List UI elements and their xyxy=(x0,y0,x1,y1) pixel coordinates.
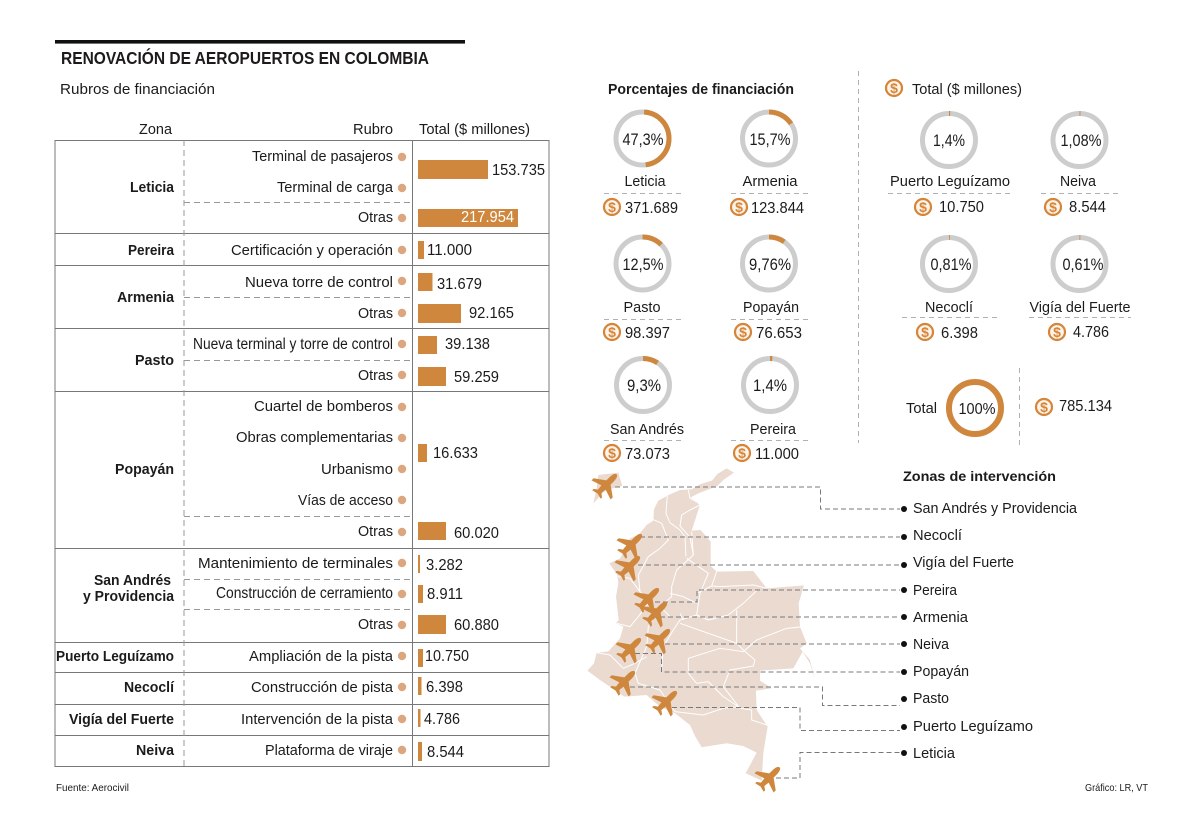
rubro labels: Otras xyxy=(358,368,393,384)
zone labels: Popayán xyxy=(115,462,174,478)
map legend: San Andrés y Providencia xyxy=(913,501,1078,517)
donut: Armenia xyxy=(731,112,808,217)
donut: Vigía del Fuerte: 4.786 xyxy=(1073,324,1109,341)
bar values: 31.679 xyxy=(437,276,482,293)
title: RENOVACIÓN DE AEROPUERTOS EN COLOMBIA xyxy=(61,47,429,68)
zone labels: Vigía del Fuerte xyxy=(69,712,174,728)
donut: San Andrés xyxy=(604,358,684,463)
bar values: 11.000 xyxy=(427,242,472,259)
rubro labels xyxy=(193,149,394,759)
rubro labels: Otras xyxy=(358,306,393,322)
bar values: 8.911 xyxy=(427,586,463,603)
table: rubros xyxy=(55,71,1149,797)
bar values: 6.398 xyxy=(426,679,463,696)
table column headers xyxy=(139,122,530,138)
rubro labels: Nueva torre de control xyxy=(245,275,393,291)
bar values: 10.750 xyxy=(425,648,469,665)
bar values: 217.954 xyxy=(461,209,514,226)
credit note: Gráfico: LR, VT xyxy=(1085,782,1149,794)
donut: Armenia: 123.844 xyxy=(751,200,804,217)
donut: Total xyxy=(906,368,1112,446)
map legend: Popayán xyxy=(913,664,969,680)
map legend: Necoclí xyxy=(913,528,962,544)
zone labels: Neiva xyxy=(136,743,175,759)
donut: Pereira: 1,4% xyxy=(753,377,787,395)
donut: Pereira: 11.000 xyxy=(755,446,799,463)
donut: Necoclí xyxy=(902,238,1000,342)
donut: Puerto Leguízamo: 1,4% xyxy=(933,132,965,150)
bar values: 39.138 xyxy=(445,336,490,353)
zone labels: Puerto Leguízamo xyxy=(56,649,174,665)
donut: Pereira xyxy=(731,358,808,463)
donut: Pasto xyxy=(604,237,684,342)
zone labels: Pereira xyxy=(128,243,175,259)
donut: Leticia: 371.689 xyxy=(625,200,678,217)
donut: Total: Total xyxy=(906,401,937,417)
zone labels: Armenia xyxy=(117,290,175,306)
bar values: 60.880 xyxy=(454,617,499,634)
rubro labels: Urbanismo xyxy=(321,462,393,478)
rubro labels: Mantenimiento de terminales xyxy=(198,556,393,572)
donut: Puerto Leguízamo xyxy=(888,114,1011,216)
donut: San Andrés: San Andrés xyxy=(610,422,684,438)
table column headers: Zona xyxy=(139,122,173,138)
bar values: 92.165 xyxy=(469,305,514,322)
map: department borders xyxy=(597,490,803,725)
donut: Neiva: 1,08% xyxy=(1060,132,1102,150)
map legend xyxy=(901,501,1078,762)
donut: Puerto Leguízamo: Puerto Leguízamo xyxy=(890,174,1010,190)
bar values xyxy=(424,162,545,761)
rubro labels: Plataforma de viraje xyxy=(265,743,393,759)
donut: Popayán: Popayán xyxy=(743,300,799,316)
rubro labels: Terminal de pasajeros xyxy=(252,149,393,165)
zone labels: Leticia xyxy=(130,180,175,196)
heading: total millones: Total ($ millones) xyxy=(912,82,1022,98)
donut: Pasto: 98.397 xyxy=(625,325,670,342)
donut: Leticia xyxy=(604,112,684,217)
donut: Popayán: 9,76% xyxy=(749,256,791,274)
bar chart: total by rubro xyxy=(418,160,545,761)
donut: Popayán: 76.653 xyxy=(756,325,802,342)
source note: Fuente: Aerocivil xyxy=(56,782,129,794)
donut: Pasto: 12,5% xyxy=(622,256,664,274)
leader lines xyxy=(615,487,900,778)
donut: Neiva: 8.544 xyxy=(1069,199,1106,216)
divider column xyxy=(858,71,860,443)
donut: San Andrés: 73.073 xyxy=(625,446,670,463)
map of Colombia xyxy=(587,468,815,781)
rubro labels: Intervención de la pista xyxy=(241,712,394,728)
donut: Neiva xyxy=(1041,114,1118,216)
rubro labels: Otras xyxy=(358,524,393,540)
rubro labels: Cuartel de bomberos xyxy=(254,399,393,415)
table column headers: Rubro xyxy=(353,122,393,138)
map legend: Pasto xyxy=(913,691,949,707)
donut: Popayán xyxy=(731,237,808,342)
zone labels xyxy=(56,180,175,759)
donut: Total: 100% xyxy=(958,401,996,418)
zone labels: Pasto xyxy=(135,353,174,369)
rubro labels: Ampliación de la pista xyxy=(249,649,394,665)
donut: Necoclí: Necoclí xyxy=(925,300,973,316)
donut: Leticia: 47,3% xyxy=(622,131,664,149)
map: mainland xyxy=(587,468,815,781)
map legend: Armenia xyxy=(913,610,969,626)
donut: Necoclí: 0,81% xyxy=(930,256,972,274)
donut: Armenia: 15,7% xyxy=(750,131,791,149)
donut: San Andrés: 9,3% xyxy=(627,377,661,395)
heading: porcentajes de financiación: Porcentajes de financiación xyxy=(608,82,794,98)
zone labels: San Andrés xyxy=(94,573,171,589)
donut: Puerto Leguízamo: 10.750 xyxy=(939,199,984,216)
donut: Vigía del Fuerte: Vigía del Fuerte xyxy=(1030,300,1130,316)
airplane icons xyxy=(587,465,789,797)
donut: Pereira: Pereira xyxy=(750,422,797,438)
heading: zonas de intervención: Zonas de intervención xyxy=(903,468,1056,484)
table column headers: Total ($ millones) xyxy=(419,122,530,138)
rubro labels: Terminal de carga xyxy=(277,180,394,196)
map legend: Vigía del Fuerte xyxy=(913,555,1014,571)
bar values: 59.259 xyxy=(454,369,499,386)
rubro labels: Obras complementarias xyxy=(236,430,393,446)
heading: rubros de financiación: Rubros de financiación xyxy=(60,81,215,98)
rubro labels: Construcción de pista xyxy=(251,680,394,696)
bar values: 153.735 xyxy=(492,162,545,179)
bar values: 8.544 xyxy=(427,744,464,761)
donut: Necoclí: 6.398 xyxy=(941,325,978,342)
map legend: Neiva xyxy=(913,637,950,653)
title xyxy=(55,40,465,68)
rubro labels: Certificación y operación xyxy=(231,243,393,259)
map: San Andrés islands xyxy=(593,473,622,503)
zone labels: Necoclí xyxy=(124,680,175,696)
bar values: 60.020 xyxy=(454,525,499,542)
donut: Total: 785.134 xyxy=(1059,398,1112,415)
donut: Armenia: Armenia xyxy=(742,174,798,190)
rubro labels: Nueva terminal y torre de control xyxy=(193,336,393,353)
map legend: Leticia xyxy=(913,746,956,762)
rubro labels: Construcción de cerramiento xyxy=(216,585,393,602)
donut: Neiva: Neiva xyxy=(1060,174,1097,190)
rubro labels: Vías de acceso xyxy=(298,493,393,509)
bar values: 16.633 xyxy=(433,445,478,462)
map legend: Puerto Leguízamo xyxy=(913,719,1033,735)
rubro labels: Otras xyxy=(358,617,393,633)
rubro labels: Otras xyxy=(358,210,393,226)
donut: Leticia: Leticia xyxy=(624,174,666,190)
bullet dots xyxy=(398,153,406,754)
zone labels: y Providencia xyxy=(83,589,175,605)
map legend: Pereira xyxy=(913,583,958,599)
donut: Pasto: Pasto xyxy=(624,300,660,316)
bar values: 4.786 xyxy=(424,711,460,728)
donut: Vigía del Fuerte: 0,61% xyxy=(1062,256,1104,274)
bar values: 3.282 xyxy=(426,557,463,574)
donut: Vigía del Fuerte xyxy=(1029,238,1131,341)
